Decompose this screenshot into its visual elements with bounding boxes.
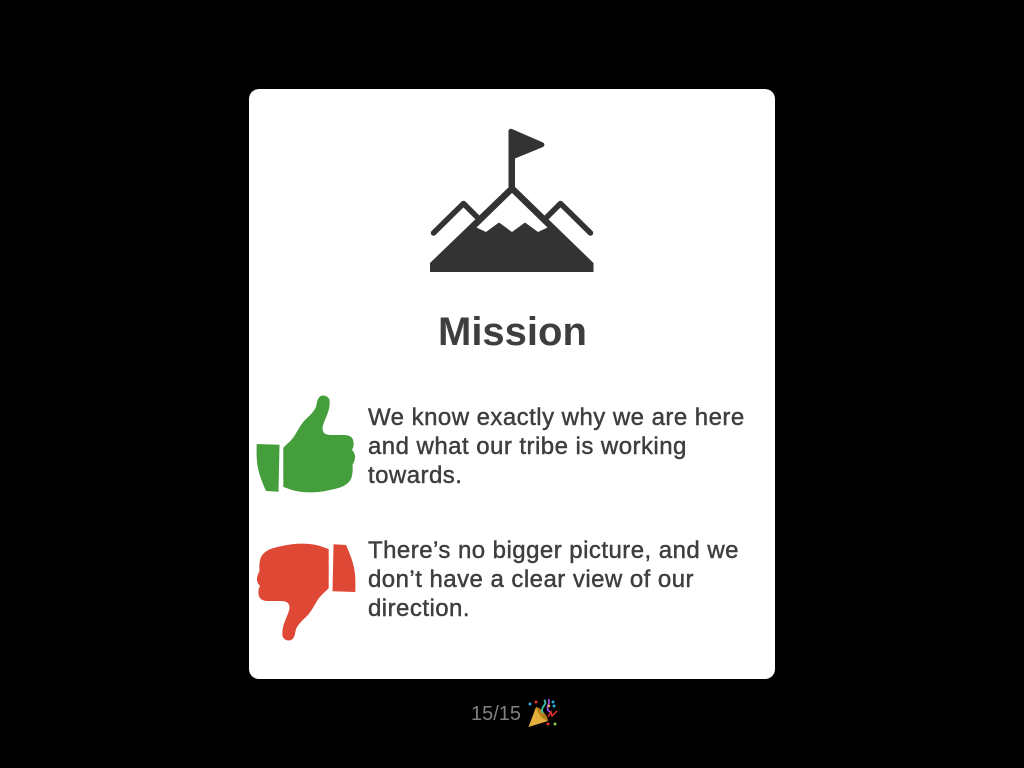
text: thumbs up statement (368, 404, 745, 489)
panel: mission card (249, 89, 775, 679)
page counter: 15/15 (471, 703, 521, 725)
heading: Mission: Mission (438, 310, 587, 354)
text: thumbs down statement: There’s no bigger picture, and we (368, 537, 739, 564)
text: thumbs up statement: towards. (368, 462, 462, 489)
text: thumbs up statement: and what our tribe is working (368, 433, 687, 460)
text: thumbs down statement: direction. (368, 595, 470, 622)
text: thumbs down statement: don’t have a clear view of our (368, 566, 694, 593)
text: thumbs up statement: We know exactly why we are here (368, 404, 745, 431)
text: thumbs down statement (368, 537, 739, 622)
